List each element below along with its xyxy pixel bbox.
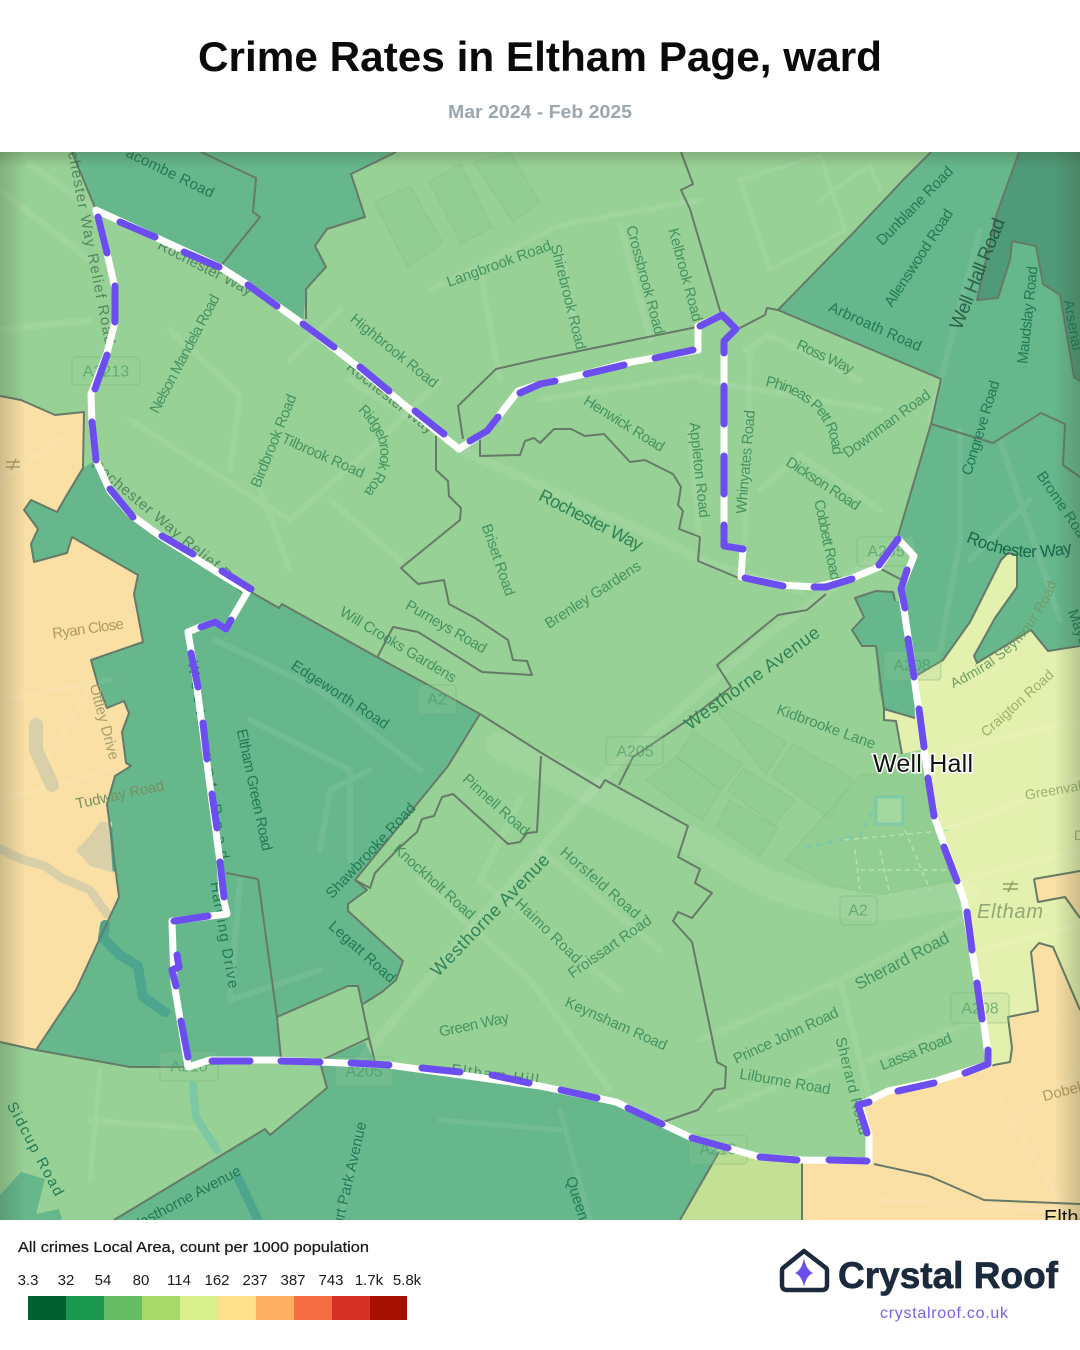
road number badges: A205 [616,744,654,760]
street labels: Horsfeld Road [557,844,643,922]
street labels: Purneys Road [402,597,490,657]
legend scale labels: 387 [280,1272,306,1289]
street labels: chester Way Relief Road [64,150,118,346]
road number badges: A2 [848,902,868,920]
legend scale labels [18,1272,422,1289]
street labels: Haimo Road [511,895,585,967]
street labels: Harding Drive [206,880,242,990]
choropleth area: south dark green [114,1042,719,1220]
street labels: Rochester Way [536,485,646,555]
street labels: Westhorne Avenue [427,850,553,980]
road number badges: A208 [961,1000,999,1018]
legend [18,1239,422,1320]
street labels: Tudway Road [74,777,166,813]
road number badges: A210 [170,1058,208,1076]
choropleth area: eastern tan notch [1034,871,1080,918]
logo: Crystal Roof [782,1251,1059,1322]
street labels: Rochester Way Relief Road [88,456,256,602]
legend scale labels: 54 [95,1272,111,1289]
legend scale labels: 80 [133,1272,149,1289]
boundary lines between areas [0,152,1080,1220]
road number badges: A208 [893,658,931,674]
choropleth area: south lime [680,1152,802,1220]
street labels: Legatt Road [325,918,399,986]
road number badges: A205 [345,1064,383,1080]
street labels: Briset Road [478,522,518,598]
street labels: Admiral Seymour Road [952,580,1056,688]
choropleth area: south west dark green [24,460,480,1067]
legend scale labels: 237 [242,1272,268,1289]
street labels: Well Hall Road [946,215,1010,333]
road number badges: A205 [867,544,905,560]
place label: Well Hall: Well Hall [873,750,973,778]
choropleth area: small yellow patch [885,710,920,754]
street labels: Keynsham Road [562,994,670,1054]
street labels: Dickson Road [783,454,863,514]
choropleth area: east yellow [914,553,1080,1066]
street labels: Pinnell Road [459,771,533,839]
street labels: Lassa Road [878,1030,954,1074]
street labels: Westhorne Avenue [681,622,823,734]
street labels: Crossbrook Road [622,224,668,336]
legend title: All crimes Local Area, count per 1000 population [18,1239,369,1256]
legend scale labels: 3.3 [18,1272,38,1289]
street labels: Eltham Green Road [233,728,275,852]
street labels: Downman Road [840,387,934,461]
place label: Eltham: Eltham [977,901,1043,923]
choropleth area: north dark green [72,152,396,324]
choropleth area: west tan [0,396,143,1050]
street labels: Sherard Road [852,928,952,994]
street labels: Eltham Hill [450,1061,540,1089]
street labels: Sherard Road [832,1035,872,1137]
rivers and ponds [0,725,258,1220]
street labels: Westmount Road [184,660,232,860]
street labels: Westhorne Avenue [125,1162,244,1237]
street network [96,206,1063,1220]
street labels: Green Way [438,1009,511,1041]
street labels: Rochester Way [967,532,1071,558]
street labels: Phineas Pett Road [766,376,844,454]
street labels: Birdbrook Road [248,392,300,490]
legend scale labels: 743 [318,1272,344,1289]
brand url: crystalroof.co.uk [880,1305,1009,1322]
road number badges: A2213 [83,364,129,380]
map panel [0,152,1080,1220]
icon: house with sparkle [782,1251,827,1290]
street labels: Appleton Road [686,421,712,519]
street labels: Prince John Road [731,1004,841,1068]
street labels: Sidcup Road [3,1099,67,1199]
street labels: Froissart Road [565,912,655,982]
subtitle: date range: Mar 2024 - Feb 2025 [448,102,632,122]
choropleth area: north east dark green [778,152,1080,677]
street labels: Langbrook Road [444,237,554,291]
street labels: Ross Way [794,336,857,378]
street labels: Rochester Way [155,237,256,299]
street labels: Rochester Way [343,359,437,438]
street labels: Brenley Gardens [542,558,644,632]
street labels: Ryan Close [51,616,125,642]
street labels: Ridgebrook Road [358,404,390,496]
street labels: Congreve Road [959,379,1003,477]
street labels: Ottley Drive [86,682,122,762]
legend scale labels: 162 [204,1272,230,1289]
legend scale labels: 32 [58,1272,74,1289]
street labels: Queen [562,1174,592,1222]
street labels: Maudslay Road [1014,265,1042,365]
park paths and pond [805,797,950,895]
choropleth area: south east tan [802,943,1080,1220]
sports pitches [374,153,955,895]
choropleth area: south west corner [0,1172,62,1220]
street labels: Arbroath Road [826,299,924,355]
street labels: Court Park Avenue [325,1120,370,1246]
street labels: Knockholt Road [390,841,478,923]
street labels: Tilbrook Road [279,430,367,482]
legend scale labels: 114 [167,1272,191,1289]
street labels: Whinyates Road [733,409,759,515]
street labels: Henwick Road [580,392,668,456]
street labels: Kidbrooke Lane [774,701,878,753]
road number badges [72,357,1009,1164]
street labels: Nelson Mandela Road [147,292,223,416]
street labels: Dunblane Road [873,163,957,249]
street labels: Cobbett Road [810,498,844,582]
title: Crime Rates in Eltham Page, ward [198,33,882,80]
street labels: acombe Road [123,144,217,202]
choropleth area: A208 dark green [852,591,915,718]
ward boundary: white outline [91,210,989,1161]
legend colour ramp [28,1296,407,1320]
street labels: Allenswood Road [881,206,957,310]
road number badges: A210 [699,1142,737,1158]
choropleth area: north east darkest [977,152,1080,381]
legend scale labels: 5.8k [393,1272,422,1289]
street labels: Highbrook Road [347,310,441,392]
street labels: Shirebrook Road [547,243,589,351]
street labels: Will Crooks Gardens [337,603,459,687]
legend scale labels: 1.7k [355,1272,384,1289]
brand name: Crystal Roof [838,1255,1059,1296]
ward boundary: purple dashes [92,217,988,1161]
street labels: Craigton Road [977,666,1057,740]
street labels: Edgeworth Road [288,657,392,733]
road number badges: A2 [427,692,447,708]
street labels: Kelbrook Road [664,226,706,324]
street labels: Shawbrooke Road [322,800,420,902]
railway station icons [6,459,1018,892]
street labels: Lilburne Road [738,1066,832,1098]
map edge vignette [0,152,1080,1220]
